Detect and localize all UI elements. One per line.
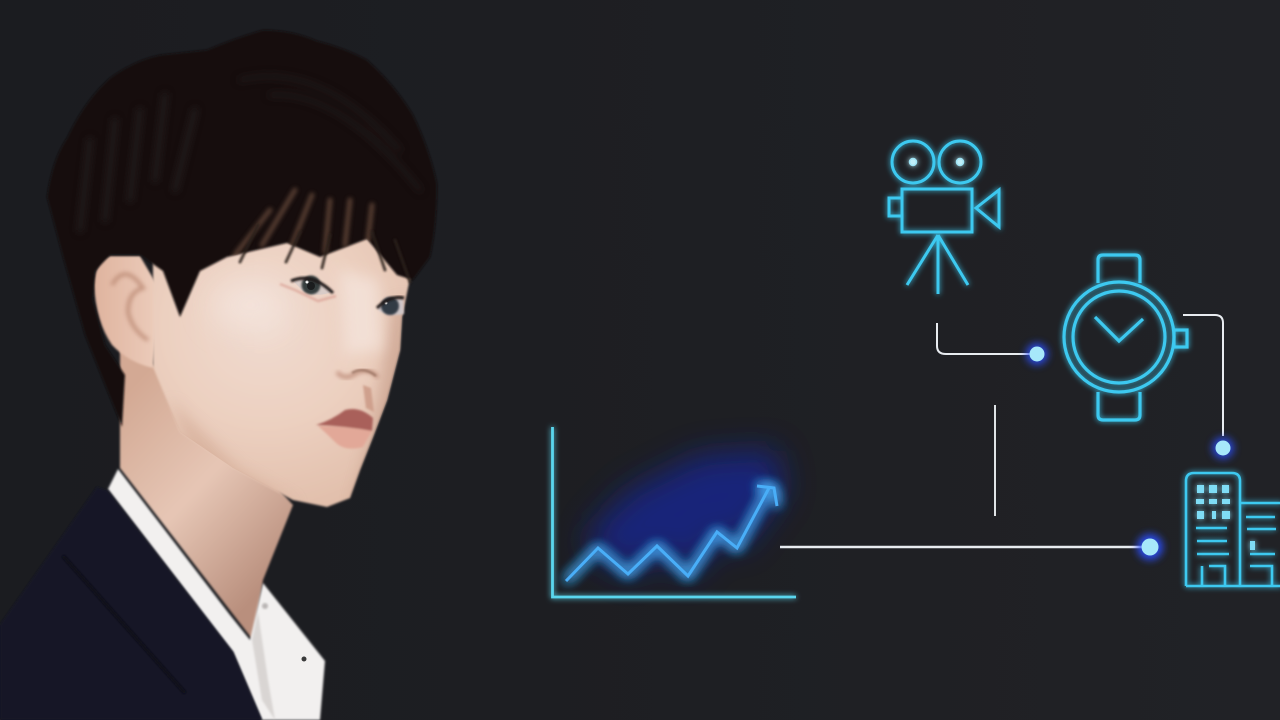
- fringe wisps: [240, 225, 410, 282]
- ear: [94, 256, 160, 368]
- connector: chart to building: [780, 534, 1163, 560]
- chart axes: [552, 427, 796, 597]
- icon: wristwatch: [1064, 255, 1187, 420]
- dark suit jacket: [0, 487, 262, 720]
- icon: film camera: [889, 141, 999, 294]
- connector dot: building: [1137, 534, 1163, 560]
- connector: camera to dot: [937, 323, 1048, 365]
- neck: [120, 340, 293, 640]
- chart: rising neon line: [552, 427, 796, 597]
- connector dot: camera: [1026, 343, 1048, 365]
- connector dot: watch: [1212, 437, 1234, 459]
- windows: [1196, 485, 1255, 550]
- hair: [47, 30, 437, 427]
- nose: [337, 370, 378, 412]
- lips: [316, 409, 373, 449]
- left eye: [280, 276, 336, 301]
- chart trend arrow: [566, 486, 777, 581]
- connector: vertical line: [994, 405, 996, 516]
- right eye: [377, 297, 404, 315]
- face: [153, 230, 420, 507]
- white shirt and collar: [108, 469, 325, 720]
- chart glow area: [590, 450, 785, 578]
- ear inner shadow: [112, 274, 148, 340]
- icon: office buildings: [1186, 473, 1280, 586]
- portrait: man in dark suit, profile view: [0, 30, 437, 720]
- connector: watch to building dot: [1183, 315, 1234, 459]
